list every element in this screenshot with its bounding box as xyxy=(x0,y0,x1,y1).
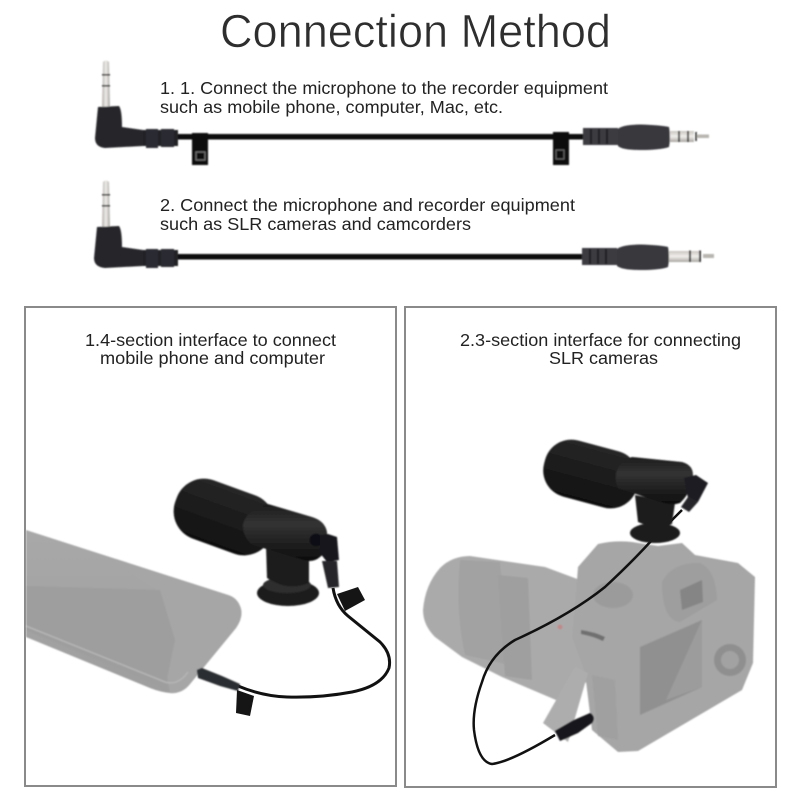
cable tab lower xyxy=(236,690,254,716)
panel caption: 1.4-section interface to connect xyxy=(85,330,336,350)
panel caption: SLR cameras xyxy=(549,348,658,368)
camera plug xyxy=(555,713,594,741)
cable 2: three-section audio cable xyxy=(94,180,714,270)
instruction 2 xyxy=(160,195,575,234)
panel border xyxy=(25,307,396,786)
phone plug xyxy=(197,668,240,691)
microphone xyxy=(537,434,708,543)
instruction 1 xyxy=(160,78,608,117)
cable tab upper xyxy=(337,587,365,611)
cable from microphone to camera xyxy=(474,510,682,764)
instruction 1: 1. 1. Connect the microphone to the recorder equipment xyxy=(160,78,608,98)
panel caption: 2.3-section interface for connecting xyxy=(460,330,741,350)
panel caption: mobile phone and computer xyxy=(100,348,325,368)
camera xyxy=(423,541,755,752)
panel: three-section interface for SLR cameras xyxy=(405,307,776,787)
instruction 2: 2. Connect the microphone and recorder equipment xyxy=(160,195,575,215)
panel caption xyxy=(460,330,741,368)
panel caption xyxy=(85,330,336,368)
title: Connection Method xyxy=(220,5,611,57)
panel border xyxy=(405,307,776,787)
cable 1: four-section audio cable xyxy=(95,60,709,165)
panel: four-section interface for phone and computer xyxy=(25,307,396,786)
instruction 1: such as mobile phone, computer, Mac, etc. xyxy=(160,97,503,117)
microphone xyxy=(165,470,339,606)
smartphone xyxy=(26,530,241,693)
cable from microphone to phone xyxy=(238,588,390,697)
instruction 2: such as SLR cameras and camcorders xyxy=(160,214,471,234)
